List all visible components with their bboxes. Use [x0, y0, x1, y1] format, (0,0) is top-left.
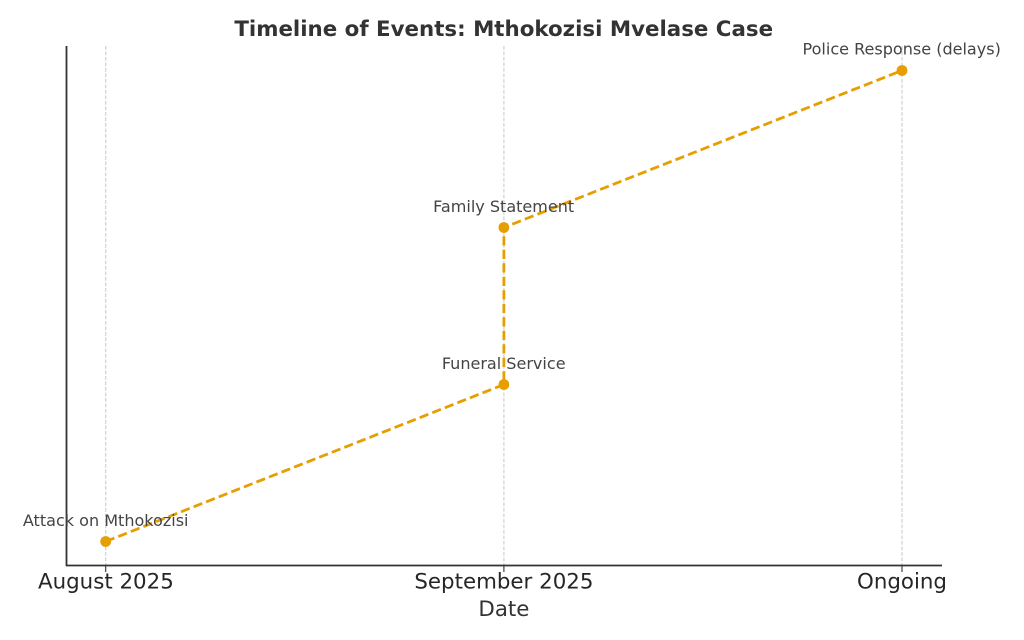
x tick labels: September 2025: [414, 570, 593, 594]
event: Family Statement: Family Statement: [433, 197, 574, 216]
event: Police Response: [803, 40, 1001, 76]
event: Funeral Service: Funeral Service: [442, 354, 566, 373]
timeline chart axes: [66, 46, 942, 572]
event: Family Statement: [433, 197, 574, 233]
event: Attack on Mthokozisi: [23, 511, 189, 547]
x axis label: Date: [478, 597, 529, 622]
x tick labels: [38, 570, 947, 594]
x tick labels: August 2025: [38, 570, 174, 594]
x tick labels: Ongoing: [857, 570, 947, 594]
event: Attack on Mthokozisi: Attack on Mthokozisi: [23, 511, 189, 530]
event: Funeral Service: [442, 354, 566, 390]
event: Police Response: Police Response (delays): [803, 40, 1001, 58]
title: Timeline of Events: Mthokozisi Mvelase Case: [234, 17, 773, 42]
timeline dashed line: [106, 70, 902, 542]
